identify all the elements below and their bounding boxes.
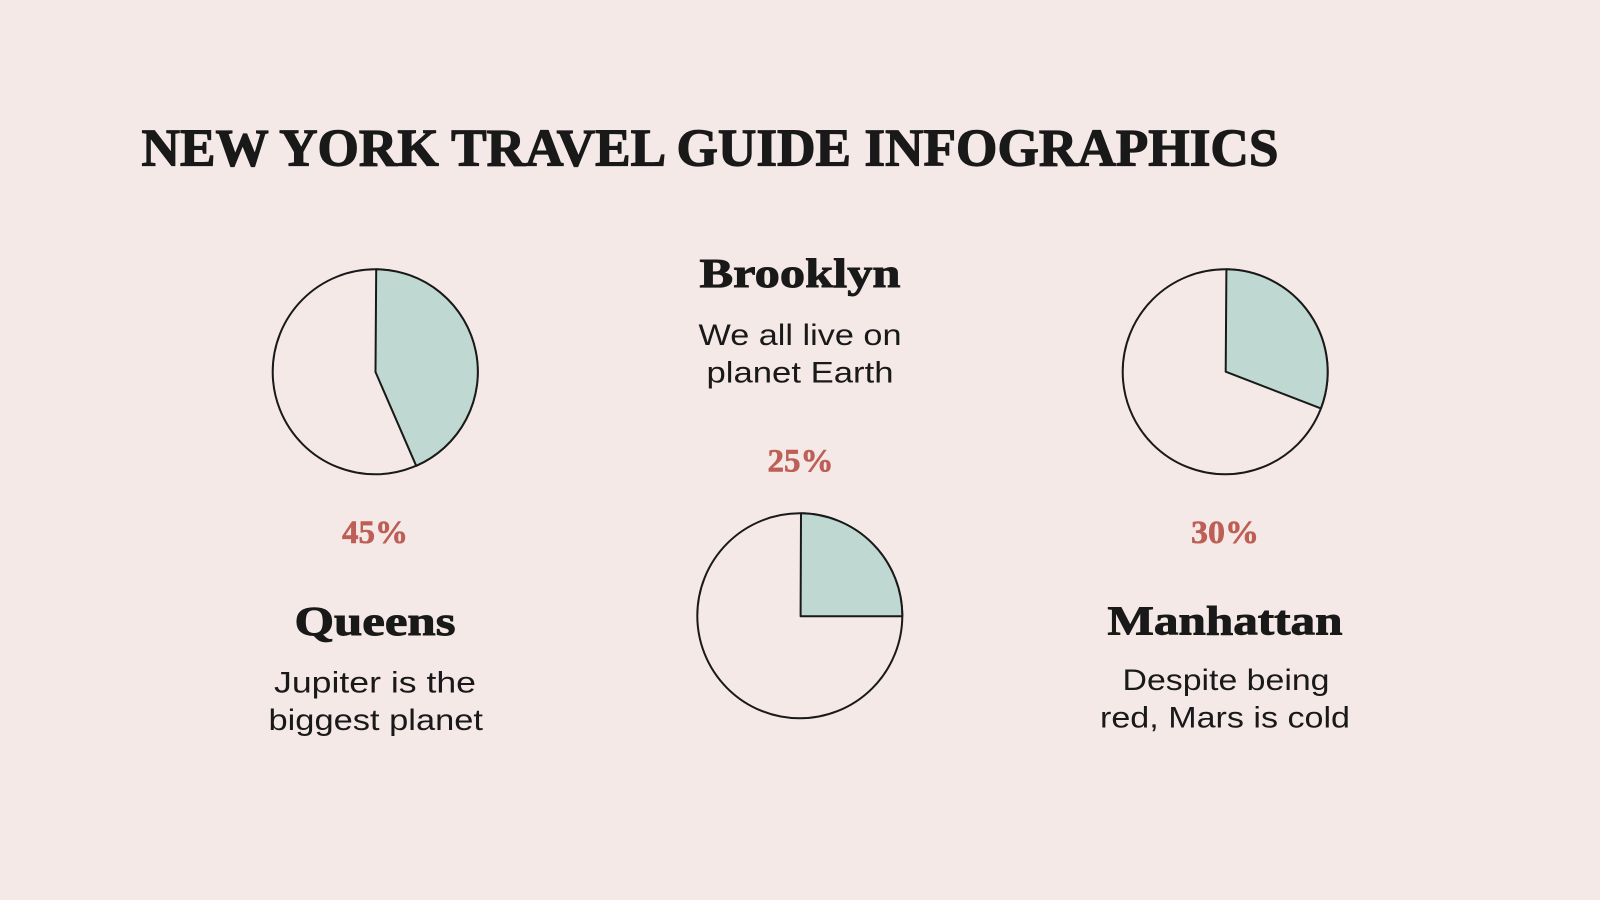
- text block: Manhattan description: red, Mars is cold: [1100, 701, 1350, 734]
- panel: Manhattan: [1100, 269, 1350, 734]
- panel: Brooklyn: [697, 250, 902, 718]
- percentage: 45%: 45%: [342, 515, 408, 551]
- text block: Brooklyn description: planet Earth: [706, 356, 894, 389]
- pie chart: Brooklyn 25%: [697, 513, 902, 718]
- panel: Queens: [268, 269, 483, 737]
- text block: Brooklyn description: We all live on: [698, 319, 902, 352]
- text block: Manhattan description: [1100, 664, 1350, 734]
- heading: Manhattan: Manhattan: [1108, 598, 1343, 644]
- text block: Queens description: Jupiter is the: [274, 667, 476, 700]
- text block: Brooklyn description: [698, 319, 902, 389]
- heading: Brooklyn: Brooklyn: [700, 250, 901, 296]
- title: NEW YORK TRAVEL GUIDE INFOGRAPHICS: [142, 120, 1278, 178]
- text block: Manhattan description: Despite being: [1122, 664, 1330, 697]
- text block: Queens description: [268, 667, 483, 737]
- percentage: 25%: 25%: [768, 444, 834, 480]
- heading: Queens: Queens: [294, 598, 456, 644]
- pie chart: Queens 45%: [273, 269, 478, 474]
- pie chart: Manhattan 30%: [1123, 269, 1328, 474]
- percentage: 30%: 30%: [1191, 515, 1259, 551]
- text block: Queens description: biggest planet: [268, 704, 483, 737]
